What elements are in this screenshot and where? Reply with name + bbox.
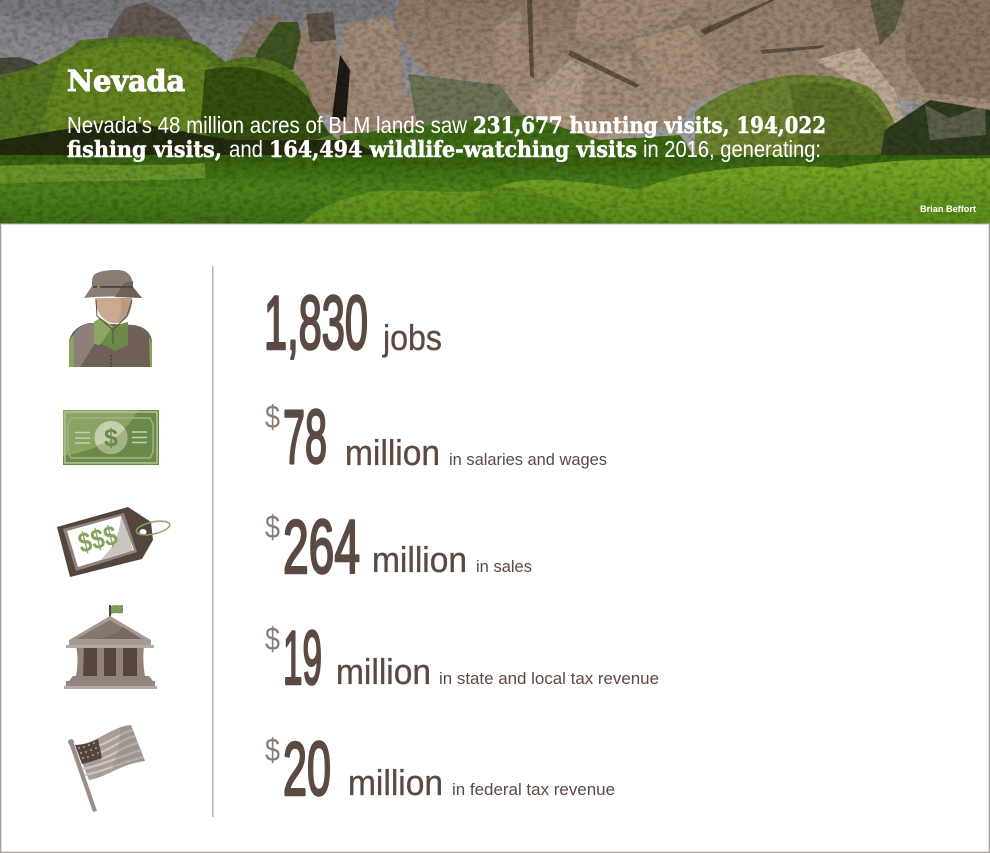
- intro text: [67, 112, 826, 163]
- divider: [212, 266, 214, 817]
- stat: salaries and wages: $: [265, 399, 280, 435]
- stat: federal tax revenue: in federal tax revenue: [452, 780, 615, 799]
- icon: dollar bill: [63, 410, 159, 465]
- stat: sales: $: [265, 509, 280, 545]
- photo header: rocks and meadow: [0, 0, 990, 224]
- stat: state and local tax revenue: [265, 616, 659, 701]
- stat: salaries and wages: million: [345, 432, 440, 473]
- icon: hunter: [69, 270, 152, 367]
- intro text: fishing visits,: [67, 137, 222, 163]
- intro text: in 2016, generating:: [643, 136, 821, 162]
- rock boulders: [492, 0, 990, 130]
- white panel frame: [0, 224, 990, 852]
- photo credit: Brian Beffort: [920, 204, 977, 215]
- stat: state and local tax revenue: $: [265, 621, 280, 657]
- stat: sales: [265, 505, 532, 590]
- intro text: and: [229, 136, 263, 162]
- stat: federal tax revenue: $: [265, 732, 280, 768]
- stat: salaries and wages: 78: [283, 395, 327, 480]
- title: Nevada: [67, 64, 185, 98]
- stat: state and local tax revenue: 19: [283, 616, 322, 701]
- icon: American flag: [68, 725, 145, 812]
- stat: federal tax revenue: 20: [283, 727, 331, 812]
- icon: price tag: $$$: [75, 519, 121, 559]
- intro text: 164,494 wildlife-watching visits: [269, 137, 637, 163]
- stat: federal tax revenue: million: [348, 762, 443, 803]
- icon: dollar bill: $: [104, 424, 118, 452]
- stat: jobs: 1,830: [264, 281, 368, 366]
- intro text: Nevada’s 48 million acres of BLM lands saw: [67, 112, 467, 138]
- stat: jobs: jobs: [382, 317, 442, 358]
- stat: salaries and wages: [265, 395, 607, 480]
- stat: sales: million: [372, 539, 467, 580]
- stat: state and local tax revenue: in state and local tax revenue: [439, 669, 659, 688]
- stat: federal tax revenue: [265, 727, 615, 812]
- stat: sales: in sales: [476, 557, 532, 576]
- stat: state and local tax revenue: million: [336, 651, 431, 692]
- icon: government building: [64, 605, 157, 689]
- stat: sales: 264: [283, 505, 360, 590]
- stat: salaries and wages: in salaries and wages: [449, 450, 607, 469]
- intro text: 231,677 hunting visits, 194,022: [473, 113, 826, 139]
- icon: price tag: [57, 507, 171, 577]
